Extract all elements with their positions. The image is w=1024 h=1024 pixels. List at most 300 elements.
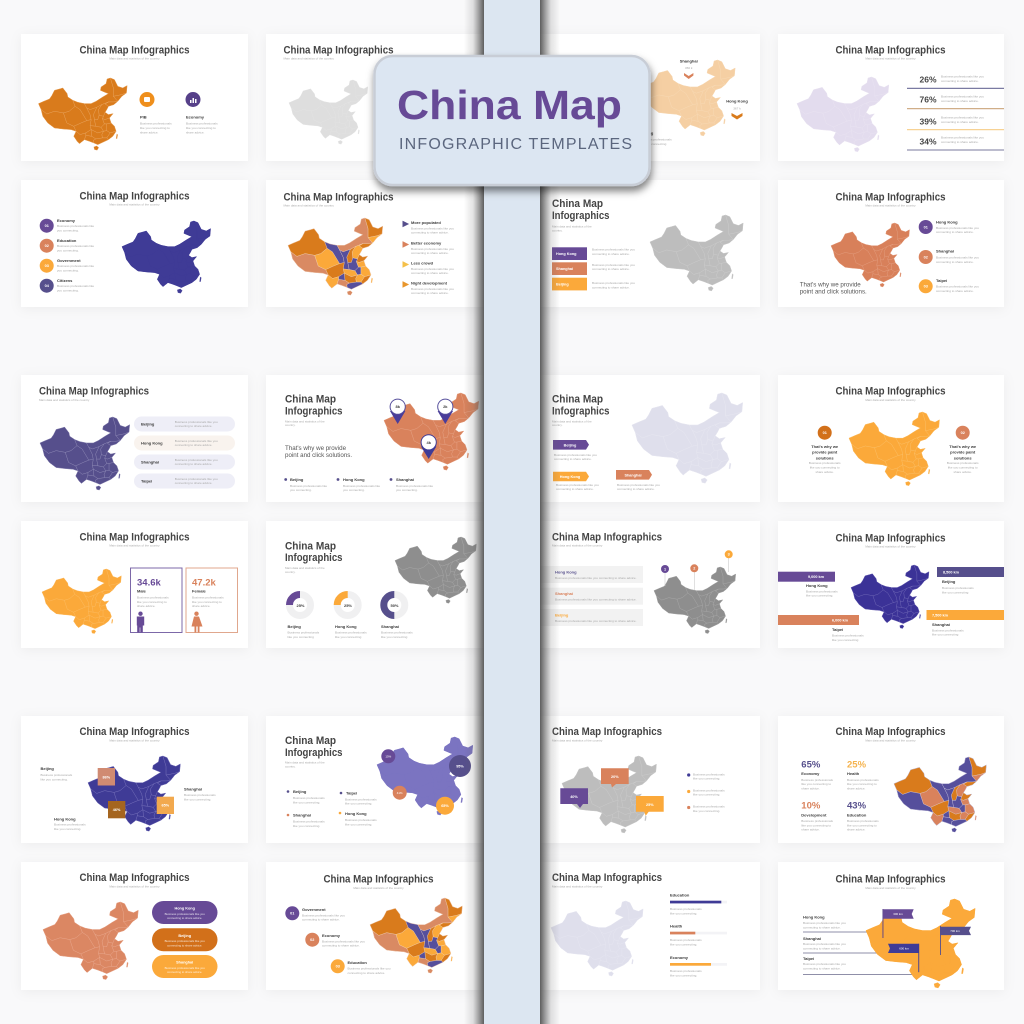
bar: Beijing: Business professionals like you	[592, 281, 635, 285]
progress: Economy: Economy	[670, 955, 689, 960]
stat: 10% Development	[801, 801, 833, 832]
pill: Shanghai: connecting to share advice.	[175, 462, 213, 466]
item 02: Education	[57, 238, 77, 243]
statement	[285, 445, 352, 459]
bubble: 41%: 41%	[397, 791, 403, 795]
item: Beijing	[284, 477, 327, 492]
flag: 700 km	[940, 926, 971, 955]
text: PIB: share advice.	[140, 130, 159, 134]
balloon: 2: 2	[693, 567, 695, 571]
pill: Shanghai: Business professionals like you	[165, 966, 205, 970]
row: Shanghai: Shanghai	[555, 591, 573, 596]
heading: China Map Infographics	[552, 872, 662, 884]
row: Beijing: Beijing	[555, 612, 569, 618]
pill: Beijing: Beijing	[141, 421, 155, 426]
item: Taipei: like you connecting.	[345, 802, 372, 806]
panel: pale map with progress bars	[533, 862, 760, 990]
callout: 40%	[560, 788, 588, 808]
legend: like you connecting.	[693, 809, 720, 813]
subtitle: Main data and statistics of the country	[865, 204, 916, 208]
bubble: 65%: 65%	[441, 804, 449, 808]
panel: grey map with callouts	[533, 716, 760, 843]
stat 76%: 76%	[919, 95, 937, 105]
bar: Hong Kong: connecting to share advice.	[592, 252, 630, 256]
icon: PIB	[140, 92, 154, 107]
label: Shanghai: Business professionals like you	[803, 942, 846, 946]
stat: 43% Education: Education	[847, 812, 867, 818]
stat: 43% Education: 43%	[847, 801, 867, 812]
tag: Beijing: Business professionals like you	[554, 453, 597, 457]
heading	[552, 394, 610, 418]
heading: China Map	[552, 198, 603, 210]
stat: 25% Health: Business professionals	[847, 778, 879, 782]
map: yellow china	[849, 412, 939, 486]
bar: Hong Kong: Business professionals	[806, 589, 838, 593]
callout: 20%	[601, 768, 629, 788]
item: Taipei: 03	[924, 285, 928, 289]
item: Hong Kong: Business professionals like you	[936, 226, 979, 230]
item: Shanghai: 02	[924, 255, 928, 259]
bar: Shanghai	[926, 610, 1004, 637]
heading: China Map	[285, 540, 336, 552]
bar: Shanghai: Shanghai	[556, 267, 573, 271]
item: Taipei	[340, 790, 377, 806]
subtitle	[552, 419, 592, 427]
item: Shanghai	[287, 813, 325, 828]
tag: Hong Kong: connecting to share advice.	[556, 487, 594, 491]
map: lilac china	[797, 77, 889, 152]
panel: periwinkle map with bubbles	[266, 716, 493, 843]
square: 46%: 46%	[113, 808, 121, 812]
subtitle: country.	[285, 764, 296, 768]
heading	[552, 198, 610, 222]
tag: Beijing: Beijing	[564, 443, 577, 447]
label: Shanghai	[184, 786, 216, 801]
label: Hong Kong	[803, 914, 875, 932]
note 01: like you connecting to	[810, 466, 840, 470]
donut: 50% Shanghai: Business professionals	[381, 630, 413, 634]
box: male	[130, 568, 182, 632]
row: Hong Kong: Hong Kong	[555, 570, 577, 574]
heading: Infographics	[552, 210, 610, 222]
pill: Beijing	[134, 416, 235, 432]
map: peach china	[642, 60, 735, 136]
stat 26%	[907, 74, 1004, 89]
bar: Hong Kong: 9,000 km	[808, 575, 825, 579]
label: Hong Kong: Business professionals	[54, 822, 86, 826]
stat 39%: 39%	[919, 117, 937, 127]
box: male: Male	[137, 588, 147, 594]
panel: yellow map with male and female	[21, 521, 248, 648]
icon: economy	[186, 92, 200, 107]
pill: Hong Kong: connecting to share advice.	[175, 443, 213, 447]
subtitle: Main data and statistics of the country	[109, 202, 160, 206]
stat: 25% Health	[847, 760, 879, 790]
badge subtitle: INFOGRAPHIC TEMPLATES	[399, 136, 632, 153]
pill: Hong Kong	[134, 436, 235, 450]
step 02: Economy	[322, 933, 341, 938]
panel: yellow map with two notes	[778, 375, 1004, 502]
item: Hong Kong: 01	[924, 225, 928, 229]
bar: Beijing: connecting to share advice.	[592, 286, 630, 290]
item 02: Business professionals like	[57, 244, 94, 248]
box: female: Female	[192, 588, 207, 594]
note 02: share advice.	[953, 470, 972, 474]
tag: Hong Kong: Hong Kong	[560, 475, 581, 479]
map: salmon china	[384, 393, 479, 470]
note 01: That's why we	[811, 444, 839, 449]
donut: 25% Beijing	[288, 594, 320, 639]
label: Hong Kong: Hong Kong	[726, 99, 748, 104]
panel: grey map with balloons	[533, 521, 760, 648]
item 01: Economy	[57, 218, 76, 223]
note 02	[947, 426, 979, 474]
item: Shanghai: Business professionals like	[396, 484, 433, 488]
label: Shanghai: 450 k	[685, 66, 693, 70]
progress: Education: Education	[670, 893, 690, 898]
panel: multi-colour map with stats	[778, 716, 1004, 843]
progress: Economy: like you connecting.	[670, 973, 697, 977]
label: Taipei: Taipei	[803, 956, 814, 961]
donut: 25% Beijing: Business professionals	[288, 630, 320, 634]
pill: Shanghai: Business professionals like you	[175, 458, 218, 462]
pill: Taipei: connecting to share advice.	[175, 481, 213, 485]
note 01: provide paint	[812, 450, 838, 455]
panel: salmon map with numbered circles	[778, 180, 1004, 307]
label: Beijing: Business professionals	[640, 138, 672, 142]
item 03: Business professionals like	[57, 264, 94, 268]
step 01: 01	[290, 912, 294, 916]
item: Hong Kong: Hong Kong	[343, 477, 365, 482]
bar: Beijing: 8,500 km	[943, 570, 960, 574]
item: night development	[403, 281, 454, 295]
stat 34%: 34%	[919, 136, 937, 146]
panel: indigo map with squares	[21, 716, 248, 843]
item: more populated	[403, 220, 454, 234]
stat: 65% Economy: share advice.	[801, 786, 820, 790]
stat: 43% Education: like you connecting to	[847, 823, 877, 827]
balloon: 2	[690, 564, 698, 590]
subtitle: Main data and statistics of the country	[109, 56, 160, 60]
item: Hong Kong: Business professionals like	[343, 484, 380, 488]
row: Shanghai: Business professionals like you connecting to share advice.	[555, 598, 637, 602]
label: Beijing: Beijing	[640, 130, 654, 136]
text: Economy: share advice.	[186, 130, 205, 134]
map: multi-colour provinces	[288, 218, 383, 295]
label: Shanghai: Shanghai	[680, 59, 698, 64]
pill: Beijing: connecting to share advice.	[175, 424, 213, 428]
note 01: share advice.	[815, 470, 834, 474]
text: Economy: like you connecting to	[186, 126, 216, 130]
stat 34%	[907, 136, 1004, 150]
label: Beijing: Beijing	[40, 766, 54, 771]
square: 86%	[98, 768, 115, 786]
stat 26%: 26%	[919, 75, 937, 85]
subtitle	[285, 761, 325, 768]
map: yellow china	[42, 569, 121, 634]
item 04: you connecting.	[57, 288, 79, 292]
pill: Hong Kong	[152, 901, 218, 924]
stat 26%: Business professionals like you	[941, 74, 984, 78]
subtitle: Main data and statistics of the country	[353, 886, 404, 890]
tag: Shanghai: Business professionals like you	[617, 483, 660, 487]
bubble: 15%: 15%	[385, 754, 392, 758]
bubble: 41%	[393, 786, 407, 800]
subtitle: Main data and statistics of the	[285, 566, 325, 570]
item 01: 01	[45, 224, 49, 228]
tag: Shanghai: Shanghai	[624, 473, 642, 477]
pill: Hong Kong: Business professionals like you	[165, 912, 205, 916]
step 03: 03	[336, 965, 340, 969]
stat: 10% Development: Business professionals	[801, 819, 833, 823]
stat 76%: Business professionals like you	[941, 94, 984, 98]
map: dark grey china	[395, 537, 476, 603]
balloon: 3: 3	[728, 553, 730, 557]
subtitle: Main data and statistics of the	[552, 224, 592, 228]
bar: Shanghai: Business professionals like you	[592, 263, 635, 267]
map: mid grey china	[650, 215, 743, 291]
balloon: 1	[661, 565, 669, 586]
bar: Shanghai: like you connecting	[932, 633, 959, 637]
map: orange china	[38, 78, 127, 150]
label: Beijing	[640, 130, 672, 146]
pill: Taipei: Taipei	[141, 478, 152, 483]
label: Hong Kong: Hong Kong	[54, 816, 76, 822]
heading: China Map Infographics	[552, 726, 662, 738]
legend: like you connecting.	[693, 776, 720, 780]
bar: Hong Kong	[552, 247, 635, 260]
bubble: 65%	[436, 797, 454, 815]
step 02: Business professionals like you	[322, 939, 365, 943]
bubble: 15%	[381, 749, 395, 763]
progress: Education: like you connecting.	[670, 912, 697, 916]
map: indigo china	[851, 565, 929, 629]
step 03	[331, 959, 391, 975]
flag: 700 km: 700 km	[950, 929, 960, 933]
text: PIB: PIB	[140, 115, 147, 120]
map: slate china	[40, 417, 130, 490]
step 01: Business professionals like you	[302, 913, 345, 917]
box: male: Business professionals	[137, 596, 169, 600]
bar: Taipei: like you connecting	[832, 638, 859, 642]
step 02	[305, 933, 365, 948]
stat 39%: connecting to share advice.	[941, 120, 979, 124]
callout: 20%: 20%	[611, 775, 619, 779]
map: multi-colour provinces	[370, 898, 462, 973]
item: Beijing: Business professionals	[293, 796, 325, 800]
panel: multi-colour map with arrows	[266, 180, 493, 307]
pill: Hong Kong: Business professionals like you	[175, 439, 218, 443]
item: night development: Night development	[411, 281, 448, 286]
bar: Beijing: Beijing	[942, 579, 956, 584]
bar: Shanghai: Business professionals	[932, 628, 964, 632]
subtitle: Main data and statistics of the	[285, 761, 325, 765]
item: Hong Kong: you connecting.	[343, 488, 365, 492]
subtitle: Main data and statistics of the country	[865, 56, 916, 60]
progress: Health: Business professionals	[670, 938, 702, 942]
heading	[285, 540, 342, 564]
heading: China Map Infographics	[836, 874, 946, 886]
subtitle: Main data and statistics of the country	[109, 544, 160, 548]
text: Economy: Business professionals	[186, 122, 218, 126]
item: Hong Kong: Hong Kong	[936, 219, 958, 224]
title badge	[374, 56, 650, 185]
heading: China Map	[285, 735, 336, 747]
stat 34%: Business professionals like you	[941, 136, 984, 140]
pill: Hong Kong: connecting to share advice.	[167, 916, 202, 920]
row: Beijing	[533, 609, 643, 626]
box: female: share advice.	[192, 604, 211, 608]
item: more populated: Business professionals like you	[411, 226, 454, 230]
label: Beijing: like you connecting	[640, 142, 667, 146]
bar: Taipei: 6,000 km	[832, 618, 849, 622]
statement: point and click solutions.	[285, 452, 352, 459]
bar: Shanghai: connecting to share advice.	[592, 267, 630, 271]
note 02: That's why we	[949, 444, 977, 449]
box: male: like you connecting to	[137, 600, 167, 604]
pill: Hong Kong: Hong Kong	[141, 440, 163, 445]
panel: indigo map with distance bars	[778, 521, 1004, 648]
map: pale china	[551, 901, 643, 976]
pin: 2k	[438, 399, 453, 424]
bubble: 95%: 95%	[456, 764, 464, 768]
bar: Hong Kong	[778, 572, 838, 598]
heading: China Map Infographics	[836, 532, 946, 544]
donut: 25% Hong Kong: Business professionals	[335, 630, 367, 634]
bar: Beijing	[937, 567, 1004, 594]
item: Hong Kong	[339, 811, 377, 826]
panel: slate map with pills	[21, 375, 248, 502]
pill: Shanghai: Shanghai	[141, 459, 159, 464]
map: salmon china	[831, 223, 909, 287]
item: Taipei: Business professionals	[345, 797, 377, 801]
label: Shanghai: like you connecting.	[184, 797, 211, 801]
donut: 25% Beijing: 25%	[296, 603, 305, 608]
item: Hong Kong	[337, 477, 380, 492]
box: female: Business professionals	[192, 596, 224, 600]
step 03: Business professionals like you	[348, 966, 391, 970]
panel: grey map	[266, 34, 493, 161]
stat: 43% Education: Business professionals	[847, 819, 879, 823]
item: less crowd: Business professionals like you	[411, 267, 454, 271]
tag: Hong Kong	[553, 472, 599, 491]
bar: Beijing: Beijing	[556, 282, 569, 286]
text: PIB: Business professionals	[140, 122, 172, 126]
balloon: 1: 1	[664, 567, 666, 571]
item: better economy: Better economy	[411, 241, 442, 246]
heading: China Map	[285, 394, 336, 406]
central band with side shadows	[464, 0, 560, 1024]
legend: Business professionals	[693, 788, 725, 792]
bar: Shanghai	[552, 262, 635, 275]
item: less crowd	[403, 261, 454, 275]
heading: Infographics	[552, 406, 610, 418]
statement: That's why we provide	[800, 282, 861, 289]
item 04: Citizens	[57, 278, 73, 283]
stat: 25% Health: share advice.	[847, 786, 866, 790]
bar: Hong Kong: Business professionals like you	[592, 248, 635, 252]
item: Taipei: connecting to share advice.	[936, 289, 974, 293]
bar: Beijing: like you connecting	[942, 590, 969, 594]
label: Hong Kong	[54, 816, 86, 831]
heading: China Map Infographics	[836, 44, 946, 56]
heading: China Map Infographics	[324, 874, 434, 886]
label: Taipei: connecting to share advice.	[803, 966, 841, 970]
item: Beijing: Beijing	[290, 477, 304, 482]
item: Hong Kong: Hong Kong	[345, 811, 367, 816]
heading: China Map Infographics	[80, 532, 190, 544]
label: Hong Kong	[726, 99, 748, 120]
item 02: 02	[45, 244, 49, 248]
item 01	[40, 218, 94, 233]
heading: Infographics	[285, 406, 342, 418]
note 01: solutions	[816, 455, 834, 460]
subtitle: country.	[552, 423, 563, 427]
step 01: connecting to share advice.	[302, 918, 340, 922]
progress: Education	[670, 893, 727, 916]
subtitle: Main data and statistics of the country	[865, 398, 916, 402]
panel: grey map with coloured bars	[533, 180, 760, 307]
bar: Shanghai: Shanghai	[932, 622, 950, 627]
map: indigo china	[88, 756, 180, 831]
bar: Hong Kong: like you connecting.	[806, 594, 833, 598]
pin: 4k	[421, 435, 436, 459]
item: Beijing: Business professionals like	[290, 484, 327, 488]
panel: peach map with chevrons	[533, 34, 760, 161]
bar: Hong Kong: Hong Kong	[556, 252, 577, 256]
stat: 10% Development: 10%	[801, 801, 821, 812]
callout: 25%: 25%	[646, 803, 654, 807]
stat 26%: connecting to share advice.	[941, 79, 979, 83]
subtitle: Main data and statistics of the country	[284, 56, 334, 60]
pill: Beijing: Business professionals like you	[175, 420, 218, 424]
item: Shanghai	[919, 249, 979, 264]
item: more populated: More populated	[411, 220, 441, 225]
map: periwinkle china	[377, 737, 473, 815]
bar: Beijing: Business professionals	[942, 586, 974, 590]
bar: Taipei: Business professionals	[832, 634, 864, 638]
subtitle: Main data and statistics of the country	[865, 545, 916, 549]
pill: Shanghai: connecting to share advice.	[167, 970, 202, 974]
panel: salmon map with pins	[266, 375, 493, 502]
item 03	[40, 258, 94, 273]
box: male: share advice.	[137, 604, 156, 608]
item 03: Government	[57, 258, 81, 263]
flag: 600 km: 600 km	[899, 946, 909, 950]
item: Shanghai: you connecting.	[396, 488, 418, 492]
statement	[800, 282, 867, 296]
label: Shanghai: Shanghai	[803, 936, 821, 941]
stat: 65% Economy	[801, 760, 833, 790]
pin: 4k: 4k	[426, 440, 432, 445]
donut: 25% Hong Kong: like you connecting	[335, 635, 362, 639]
subtitle: Main data and statistics of the country	[39, 398, 90, 402]
donut: 25% Hong Kong	[335, 594, 367, 639]
square: 65%: 65%	[161, 804, 170, 808]
map: multi-colour provinces	[894, 757, 986, 832]
label: Taipei: Business professionals like you	[803, 962, 846, 966]
panel: pale map with arrow tags	[533, 375, 760, 502]
item: Hong Kong	[919, 219, 979, 234]
callout: 40%: 40%	[570, 795, 578, 799]
stat: 10% Development: like you connecting to	[801, 823, 831, 827]
item: Beijing: you connecting.	[290, 488, 312, 492]
label: Hong Kong: Hong Kong	[803, 914, 825, 919]
row: Hong Kong	[533, 566, 643, 583]
label: Hong Kong: connecting to share advice.	[803, 926, 841, 930]
donut: 50% Shanghai	[381, 594, 413, 639]
bubble: 95%	[449, 755, 471, 777]
